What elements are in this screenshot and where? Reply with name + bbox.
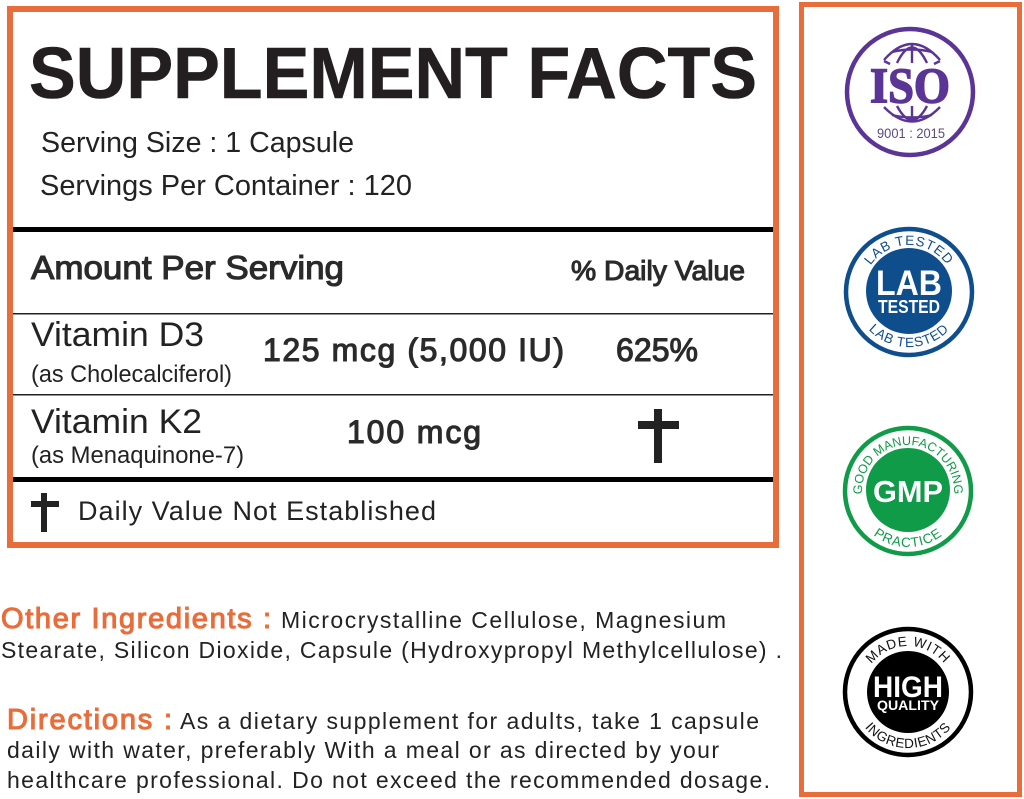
icon: ISO badge xyxy=(847,29,973,155)
vitamin D3 row: 625% xyxy=(616,332,698,368)
row divider xyxy=(13,313,773,314)
vitamin D3 row: 125 mcg (5,000 IU) xyxy=(263,332,564,368)
icon: lab tested badge xyxy=(844,226,974,358)
icon: lab tested badge: TESTED xyxy=(878,297,940,317)
vitamin K2 row xyxy=(31,403,679,469)
other ingredients: Stearate, Silicon Dioxide, Capsule (Hydroxypropyl Methylcellulose) . xyxy=(1,637,782,663)
icon: lab tested badge: LAB xyxy=(876,264,942,303)
icon: GMP badge: PRACTICE xyxy=(874,528,942,547)
other ingredients xyxy=(1,603,782,663)
directions: Directions : xyxy=(7,704,172,736)
icon: GMP badge: GMP xyxy=(873,474,943,509)
vitamin D3 row: Vitamin D3 xyxy=(31,316,204,354)
panel: certifications xyxy=(799,2,1022,797)
row divider xyxy=(13,394,773,396)
vitamin K2 row: (as Menaquinone-7) xyxy=(31,442,244,469)
daily value heading: % Daily Value xyxy=(571,255,745,286)
icon: lab tested badge: LAB TESTED xyxy=(864,236,952,264)
other ingredients: Other Ingredients : xyxy=(1,603,271,635)
icon: high quality badge: QUALITY xyxy=(877,697,940,713)
icon: ISO badge: 9001 : 2015 xyxy=(877,125,945,141)
vitamin K2 row: Vitamin K2 xyxy=(31,403,202,441)
icon: ISO badge: ISO xyxy=(870,57,950,113)
icon: GMP badge: GOOD MANUFACTURING xyxy=(853,436,963,494)
directions: As a dietary supplement for adults, take 1 capsule xyxy=(180,708,759,734)
vitamin D3 row xyxy=(31,316,698,388)
icon: dagger xyxy=(638,409,679,463)
icon: high quality badge: HIGH xyxy=(873,671,943,704)
icon: high quality badge: MADE WITH xyxy=(865,636,950,664)
panel: supplement facts xyxy=(10,9,776,545)
title: SUPPLEMENT FACTS xyxy=(29,34,757,114)
footnote: Daily Value Not Established xyxy=(78,496,436,526)
vitamin D3 row: (as Cholecalciferol) xyxy=(31,361,232,388)
icon: high quality badge xyxy=(842,626,974,758)
serving size: Serving Size : 1 Capsule xyxy=(41,127,354,159)
servings per container: Servings Per Container : 120 xyxy=(40,170,412,202)
other ingredients: Microcrystalline Cellulose, Magnesium xyxy=(281,607,726,633)
icon: dagger footnote xyxy=(31,493,59,532)
thick divider xyxy=(13,477,773,482)
icon: GMP badge xyxy=(842,426,974,556)
vitamin K2 row: 100 mcg xyxy=(347,414,481,450)
amount per serving heading: Amount Per Serving xyxy=(31,249,344,286)
directions xyxy=(7,704,770,793)
icon: lab tested badge: LAB TESTED xyxy=(869,324,947,348)
thick divider xyxy=(13,227,773,232)
directions: daily with water, preferably With a meal or as directed by your xyxy=(7,737,719,763)
icon: high quality badge: INGREDIENTS xyxy=(866,722,950,748)
directions: healthcare professional. Do not exceed the recommended dosage. xyxy=(7,767,770,793)
